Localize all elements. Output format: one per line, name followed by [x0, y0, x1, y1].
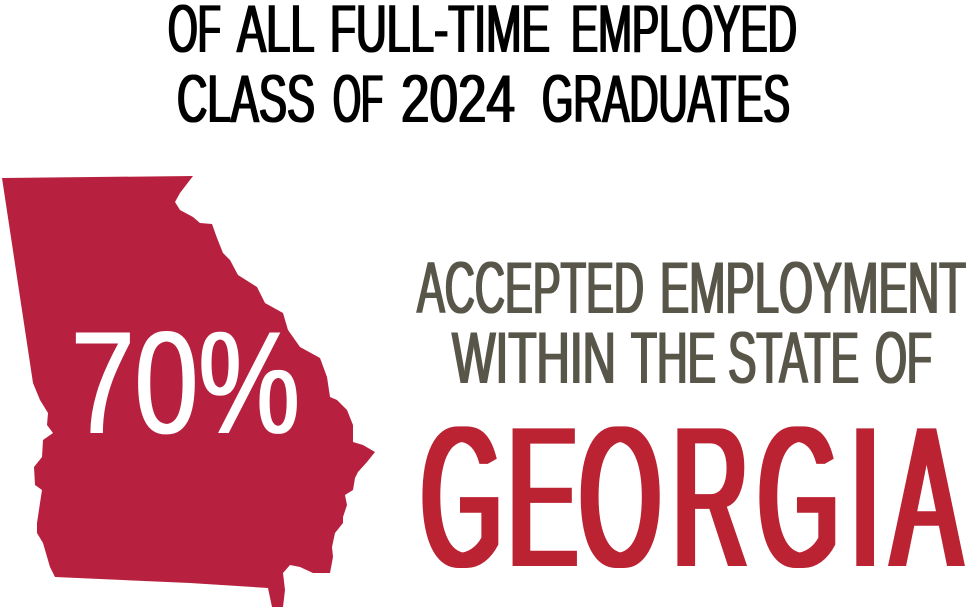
- text: accepted employment within the state of: WITHIN: [452, 318, 616, 399]
- text: accepted employment within the state of: THE: [631, 318, 716, 399]
- heading: [168, 0, 797, 137]
- heading: CLASS: [177, 61, 315, 137]
- heading: GRADUATES: [542, 61, 790, 137]
- text: accepted employment within the state of: ACCEPTED: [417, 248, 644, 329]
- text: Georgia: GEORGIA: [421, 385, 961, 609]
- map: state of Georgia with 70%: [2, 176, 375, 607]
- heading: OF: [333, 61, 383, 137]
- statistic: 70%: 70%: [71, 301, 300, 464]
- text: accepted employment within the state of: [417, 248, 966, 399]
- text: accepted employment within the state of: STATE: [728, 318, 859, 399]
- heading: 2024: [401, 61, 515, 137]
